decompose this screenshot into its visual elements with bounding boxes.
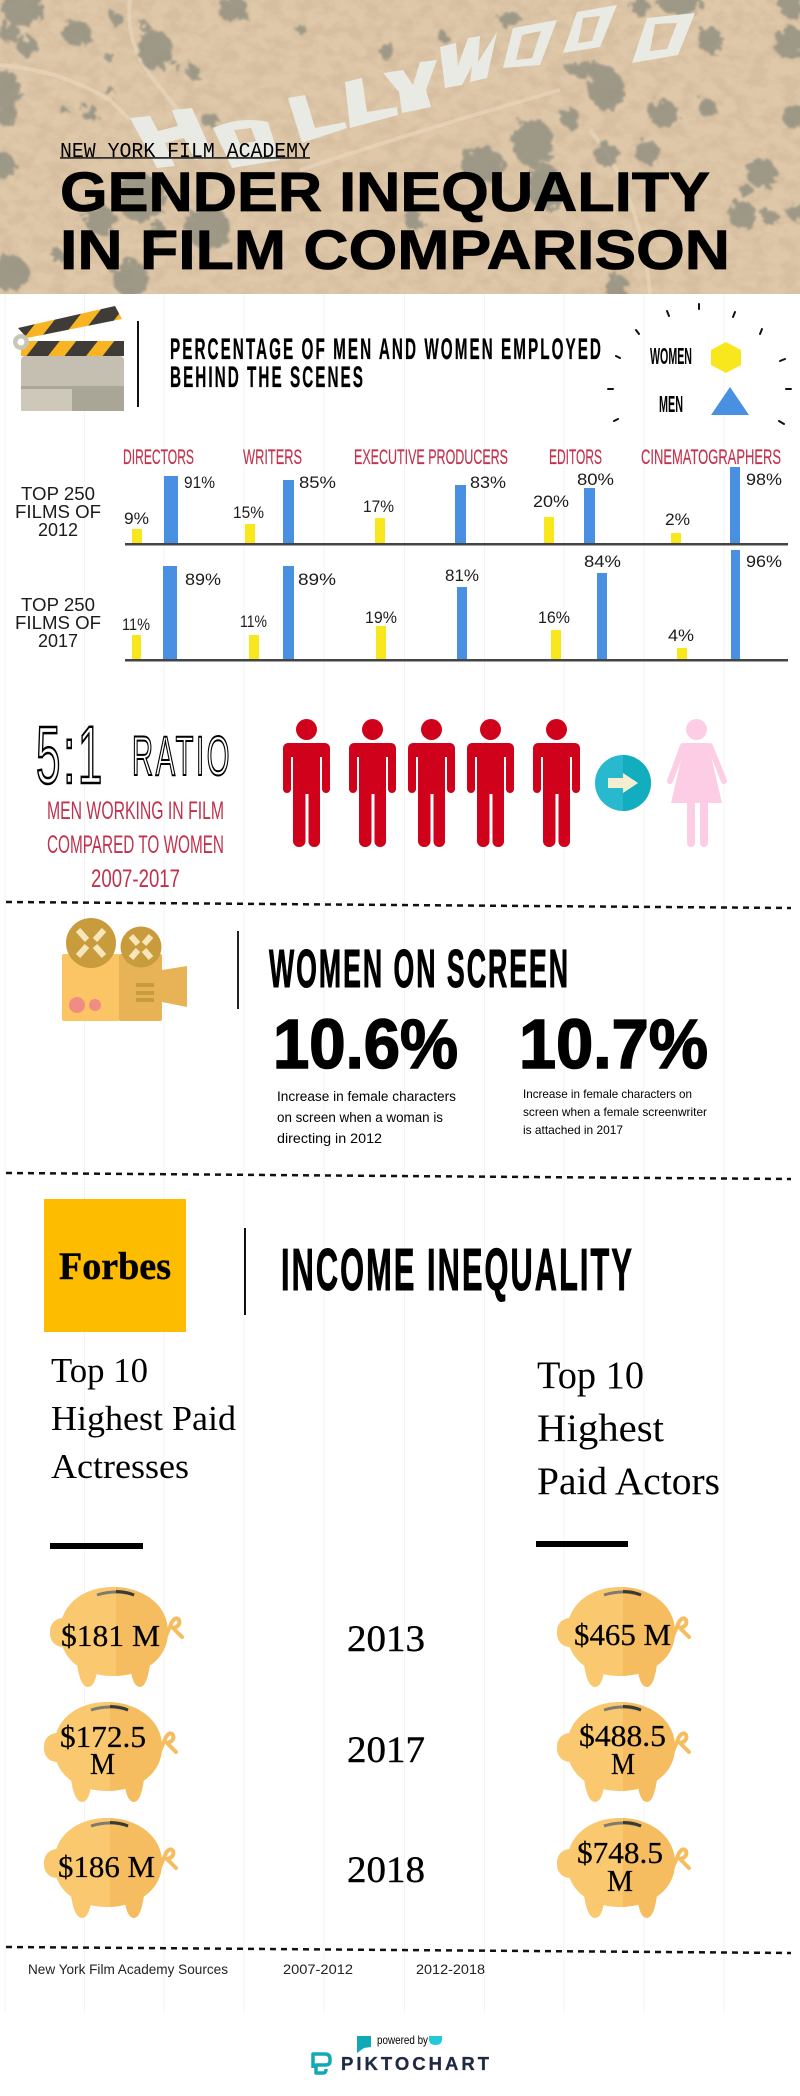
bar chart: 2017: 84% — [584, 553, 621, 571]
powered by Piktochart logo — [313, 2033, 490, 2074]
stat: 10.6% — [273, 1005, 458, 1146]
caption: men working in film: COMPARED TO WOMEN — [47, 831, 224, 859]
eyebrow: New York Film Academy: NEW YORK FILM ACADEMY — [60, 141, 310, 164]
column heading: actresses: Top 10 — [51, 1351, 148, 1390]
bar chart: 2012 — [124, 467, 788, 546]
panel: income inequality — [44, 1199, 720, 1918]
page background grid — [5, 294, 724, 2013]
bar chart: 2017: 89% — [298, 571, 336, 589]
stat: 10.6%: directing in 2012 — [277, 1131, 382, 1146]
column heading: actors: Highest — [537, 1407, 664, 1450]
legend: MEN — [659, 391, 683, 417]
caption: men working in film: 2007-2017 — [91, 865, 180, 893]
bar chart: 2017: 96% — [746, 553, 782, 571]
title: IN FILM COMPARISON — [60, 218, 730, 281]
pig: actors 2017: $488.5 — [579, 1718, 666, 1753]
bar chart: 2012: 85% — [299, 474, 336, 492]
sources footer: New York Film Academy Sources — [28, 1962, 228, 1977]
bar chart: 2017: 89% — [185, 571, 221, 589]
stat: 10.7%: 10.7% — [519, 1005, 708, 1083]
panel: hero header — [0, 0, 800, 299]
pig: actors 2017: M — [611, 1746, 635, 1781]
row label: top 250 films of 2012: FILMS OF — [15, 502, 101, 522]
category labels: WRITERS — [243, 446, 302, 469]
divider — [6, 902, 791, 908]
panel: women on screen — [62, 918, 708, 1146]
bar chart: 2012: 91% — [184, 474, 215, 492]
year: 2018: 2018 — [347, 1850, 425, 1891]
stat: 10.7%: Increase in female characters on — [523, 1087, 692, 1101]
panel: employment bar charts — [15, 446, 788, 662]
panel: behind the scenes heading — [13, 304, 791, 424]
category labels: EXECUTIVE PRODUCERS — [354, 446, 508, 469]
stat: 10.7% — [519, 1005, 708, 1137]
column heading: actors: Paid Actors — [537, 1460, 720, 1503]
divider — [6, 1947, 791, 1953]
column heading: actors — [536, 1354, 720, 1547]
pig: actresses 2017: M — [90, 1746, 115, 1781]
heading: 5:1 ratio: 5:1 — [36, 710, 105, 801]
bar chart: 2017: 16% — [538, 609, 570, 627]
year: 2017: 2017 — [347, 1730, 425, 1771]
pig: actors 2018 — [557, 1818, 689, 1918]
icon: woman — [670, 719, 724, 847]
divider — [6, 1173, 791, 1179]
heading: percentage of men and women — [170, 333, 603, 394]
stat: 10.7%: is attached in 2017 — [523, 1123, 623, 1137]
row label: top 250 films of 2012: TOP 250 — [21, 484, 95, 504]
row label: top 250 films of 2012 — [15, 484, 101, 540]
bar chart: 2012: 98% — [746, 471, 782, 489]
bar chart: 2017 — [122, 550, 788, 662]
legend: WOMEN — [650, 343, 692, 369]
stat: 10.6%: on screen when a woman is — [277, 1110, 443, 1125]
icon: five men — [283, 719, 580, 847]
bar chart: 2017: 19% — [365, 609, 397, 627]
pig: actresses 2018: $186 M — [58, 1849, 155, 1884]
row label: top 250 films of 2012: 2012 — [38, 520, 78, 540]
icon: film projector — [62, 918, 187, 1021]
category labels: DIRECTORS — [123, 446, 194, 469]
bar chart: 2012: 80% — [577, 471, 614, 489]
bar chart: 2017: 81% — [445, 567, 479, 585]
heading: 5:1 ratio: RATIO — [132, 724, 232, 787]
bar chart: 2017: 11% — [122, 616, 150, 634]
column heading: actresses: Actresses — [51, 1447, 189, 1486]
bar chart: 2012: 17% — [363, 498, 394, 516]
bar chart: 2012: 15% — [233, 504, 264, 522]
stat: 10.6%: Increase in female characters — [277, 1089, 456, 1104]
row label: top 250 films of 2017: TOP 250 — [21, 595, 95, 615]
column heading: actresses: Highest Paid — [51, 1399, 237, 1438]
icon: arrow circle — [595, 755, 651, 811]
bar chart: 2012: 83% — [470, 474, 506, 492]
powered by Piktochart logo: powered by — [377, 2033, 428, 2047]
powered by Piktochart logo: PIKTOCHART — [341, 2053, 490, 2074]
stat: 10.6%: 10.6% — [273, 1005, 458, 1083]
title — [60, 160, 730, 281]
bar chart: 2017: 4% — [668, 627, 694, 645]
category labels — [123, 446, 781, 469]
heading: percentage of men and women: BEHIND THE SCENES — [170, 361, 365, 394]
title: GENDER INEQUALITY — [60, 160, 710, 223]
Forbes logo: Forbes — [59, 1245, 171, 1288]
pig: actresses 2017: $172.5 — [60, 1719, 146, 1754]
bar chart: 2017: 11% — [240, 613, 267, 631]
sources footer: 2012-2018 — [416, 1962, 485, 1977]
caption: men working in film — [47, 797, 224, 893]
icon: film clapperboard — [13, 306, 124, 411]
column heading: actresses — [50, 1351, 237, 1549]
category labels: EDITORS — [549, 446, 602, 469]
pig: actors 2017 — [557, 1702, 689, 1802]
column heading: actors: Top 10 — [537, 1354, 644, 1397]
sources footer — [28, 1962, 485, 1977]
legend — [608, 304, 791, 424]
row label: top 250 films of 2017: FILMS OF — [15, 613, 101, 633]
hero photo of the Hollywood sign — [0, 0, 800, 299]
panel: 5 to 1 ratio — [36, 710, 724, 893]
row label: top 250 films of 2017: 2017 — [38, 631, 78, 651]
stat: 10.7%: screen when a female screenwriter — [523, 1105, 707, 1119]
pig: actors 2013: $465 M — [574, 1617, 671, 1652]
year: 2013: 2013 — [347, 1619, 425, 1660]
sources footer: 2007-2012 — [283, 1962, 353, 1977]
pig: actresses 2013: $181 M — [61, 1618, 160, 1653]
Forbes logo — [44, 1199, 186, 1332]
pig: actresses 2018 — [44, 1818, 176, 1918]
bar chart: 2012: 2% — [665, 511, 690, 529]
bar chart: 2012: 20% — [533, 493, 569, 511]
pig: actresses 2013 — [50, 1587, 182, 1687]
pig: actresses 2017 — [44, 1702, 176, 1802]
row label: top 250 films of 2017 — [15, 595, 101, 651]
bar chart: 2012: 9% — [124, 510, 149, 528]
caption: men working in film: MEN WORKING IN FILM — [47, 797, 224, 825]
heading: 5:1 ratio — [36, 710, 232, 801]
pig: actors 2013 — [557, 1587, 689, 1687]
pig: actors 2018: $748.5 — [577, 1835, 663, 1870]
pig: actors 2018: M — [607, 1863, 633, 1898]
